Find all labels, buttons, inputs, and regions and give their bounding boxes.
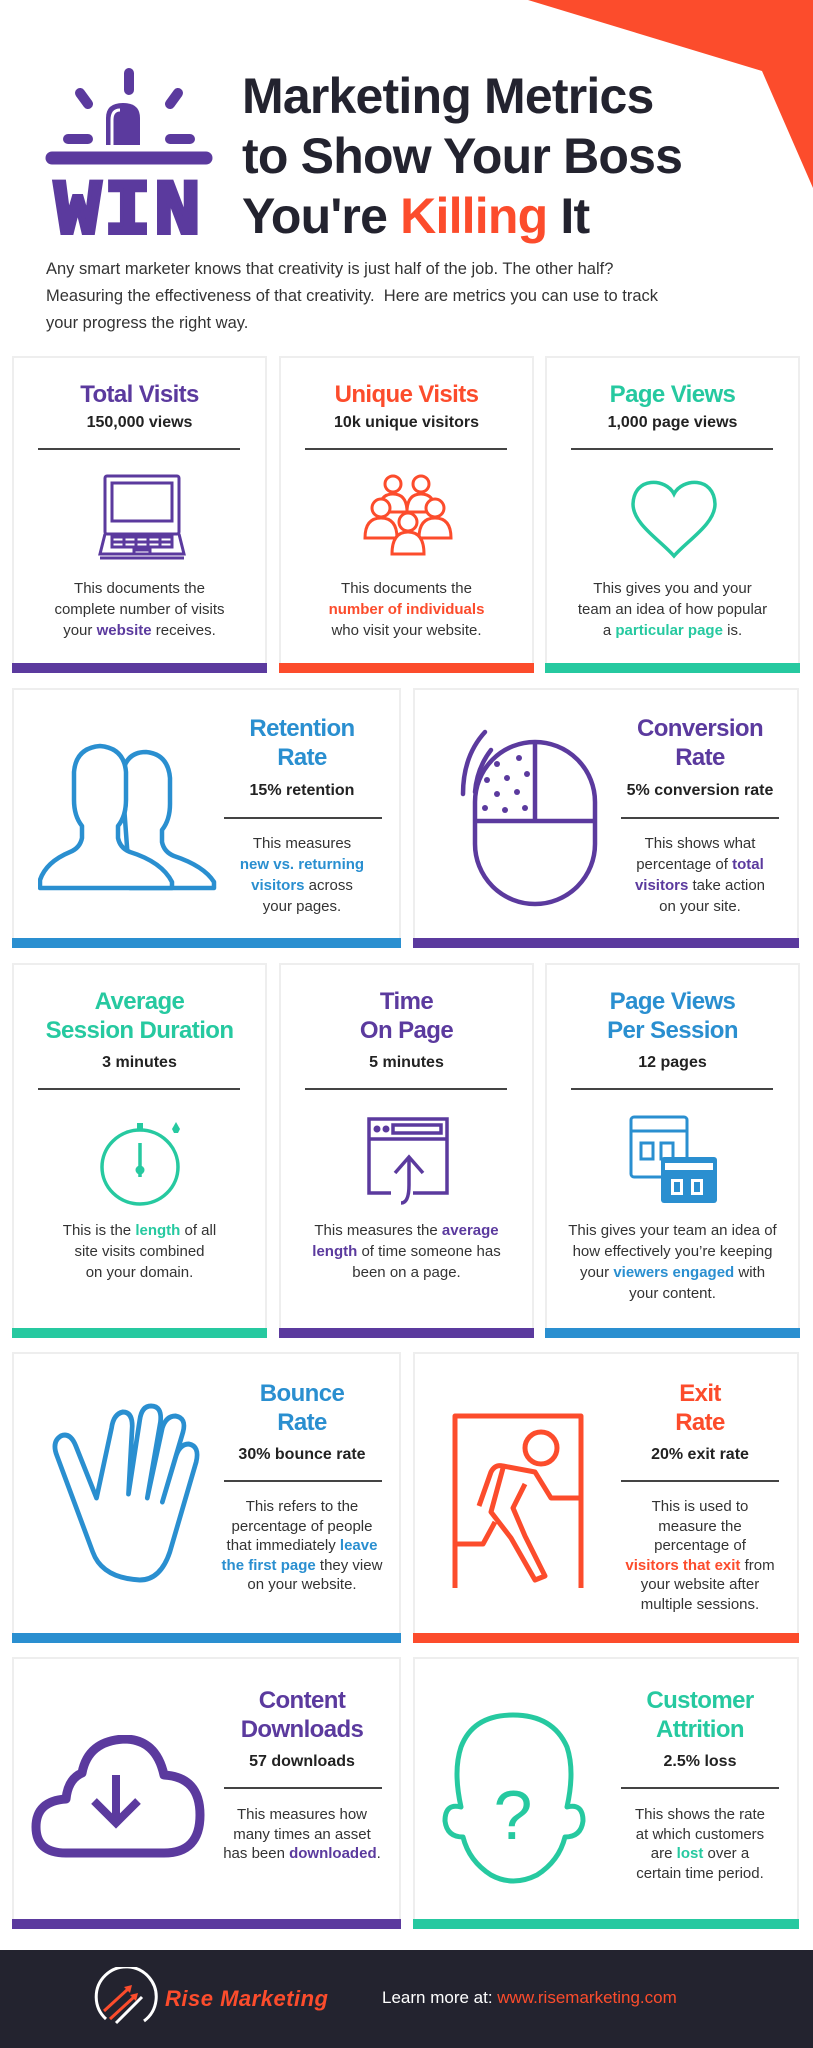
icon: stopwatch <box>100 1122 180 1206</box>
panel: conversion rate: Conversion <box>637 715 763 742</box>
panel: conversion rate: Rate <box>675 744 725 771</box>
panel: page views per session <box>545 963 800 1338</box>
panel: page views: 1,000 page views <box>608 414 737 431</box>
panel: customer attrition: Customer <box>646 1687 754 1714</box>
panel: unique visits: Unique Visits <box>335 381 478 408</box>
icon: rise marketing logo <box>94 1967 158 2024</box>
panel: unique visits <box>279 356 534 673</box>
panel: exit rate: Rate <box>675 1409 725 1436</box>
panel: conversion rate: visitors take action <box>635 877 765 894</box>
intro text <box>46 260 658 332</box>
panel: time on page: This measures the average <box>314 1222 499 1239</box>
panel: page views per session: your viewers engaged with <box>580 1264 765 1281</box>
panel: total visits: Total Visits <box>80 381 199 408</box>
panel: bounce rate <box>12 1352 401 1643</box>
panel: exit rate: Exit <box>679 1380 721 1407</box>
title: to Show Your Boss <box>242 128 682 184</box>
icon: heart <box>631 480 717 558</box>
panel: unique visits: number of individuals <box>329 601 484 618</box>
panel: retention rate: Rate <box>277 744 327 771</box>
panel: conversion rate: 5% conversion rate <box>627 782 773 799</box>
panel: average session duration: site visits combined <box>74 1243 205 1260</box>
panel: retention rate: new vs. returning <box>240 856 364 873</box>
icon: laptop <box>98 474 186 560</box>
panel: time on page: 5 minutes <box>369 1054 444 1071</box>
footer <box>0 1950 813 2048</box>
brand name: Rise Marketing <box>165 1986 328 2011</box>
panel: exit rate: This is used to <box>652 1498 748 1515</box>
panel: unique visits: who visit your website. <box>331 622 482 639</box>
panel: page views: team an idea of how popular <box>578 601 767 618</box>
panel: customer attrition <box>413 1657 799 1929</box>
icon: WIN siren logo <box>46 68 212 238</box>
panel: page views per session: how effectively you’re keeping <box>573 1243 772 1260</box>
panel: total visits: This documents the <box>74 580 205 597</box>
panel: page views <box>545 356 800 673</box>
panel: unique visits: 10k unique visitors <box>334 414 479 431</box>
panel: retention rate: visitors across <box>251 877 353 894</box>
panel: retention rate: This measures <box>253 835 351 852</box>
panel: bounce rate: the first page they view <box>222 1556 382 1574</box>
intro text: your progress the right way. <box>46 314 248 332</box>
panel: average session duration: 3 minutes <box>102 1054 177 1071</box>
panel: bounce rate: This refers to the <box>246 1498 358 1515</box>
panel: customer attrition: 2.5% loss <box>664 1753 736 1770</box>
panel: retention rate: your pages. <box>263 898 341 915</box>
icon: stacked windows <box>630 1116 717 1203</box>
panel: time on page: On Page <box>360 1017 453 1044</box>
panel: page views per session: Per Session <box>607 1017 738 1044</box>
panel: bounce rate: Bounce <box>260 1380 344 1407</box>
panel: average session duration <box>12 963 267 1338</box>
icon: browser upload <box>367 1117 449 1205</box>
title: Marketing Metrics <box>242 68 654 124</box>
panel: conversion rate <box>413 688 799 948</box>
panel: content downloads: has been downloaded. <box>223 1845 381 1862</box>
panel: retention rate: 15% retention <box>250 782 354 799</box>
panel: bounce rate: Rate <box>277 1409 327 1436</box>
panel: retention rate: Retention <box>249 715 355 742</box>
panel: conversion rate: on your site. <box>659 898 741 915</box>
panel: unique visits: This documents the <box>341 580 472 597</box>
panel: bounce rate: on your website. <box>247 1576 357 1593</box>
panel: customer attrition: This shows the rate <box>635 1806 765 1823</box>
panel: bounce rate: percentage of people <box>232 1518 372 1534</box>
panel: total visits: complete number of visits <box>54 601 225 618</box>
panel: page views per session: This gives your team an idea of <box>568 1222 777 1239</box>
panel: total visits: your website receives. <box>63 622 216 639</box>
panel: total visits <box>12 356 267 673</box>
title <box>242 68 682 244</box>
panel: page views: This gives you and your <box>593 580 752 597</box>
panel: content downloads: Downloads <box>241 1716 363 1743</box>
icon: hand <box>52 1404 200 1582</box>
panel: bounce rate: 30% bounce rate <box>238 1446 366 1463</box>
footer link text: Learn more at: www.risemarketing.com <box>382 1988 677 2007</box>
icon: two users <box>38 744 216 890</box>
panel: conversion rate: percentage of total <box>636 856 764 873</box>
panel: exit rate: 20% exit rate <box>651 1446 749 1463</box>
panel: exit rate: visitors that exit from <box>625 1556 775 1574</box>
panel: customer attrition: at which customers <box>636 1826 764 1842</box>
panel: customer attrition: certain time period. <box>636 1864 764 1882</box>
panel: page views: Page Views <box>610 381 735 408</box>
panel: exit rate: multiple sessions. <box>641 1596 759 1612</box>
panel: time on page: been on a page. <box>352 1264 461 1281</box>
panel: time on page: length of time someone has <box>312 1243 501 1260</box>
panel: content downloads: This measures how <box>237 1806 367 1823</box>
panel: average session duration: Average <box>95 988 184 1015</box>
intro text: Measuring the effectiveness of that creativity. Here are metrics you can use to track <box>46 287 658 305</box>
title: You're Killing It <box>242 188 589 244</box>
panel: page views per session: 12 pages <box>638 1054 707 1071</box>
panel: customer attrition: are lost over a <box>651 1845 749 1862</box>
panel: page views per session: Page Views <box>610 988 735 1015</box>
panel: customer attrition: Attrition <box>656 1716 744 1743</box>
panel: content downloads: 57 downloads <box>249 1753 355 1770</box>
panel: average session duration: Session Duration <box>46 1017 233 1044</box>
panel: exit rate: percentage of <box>654 1537 746 1554</box>
panel: page views: a particular page is. <box>603 622 742 639</box>
panel: exit rate: measure the <box>658 1518 742 1534</box>
panel: exit rate: your website after <box>641 1576 759 1593</box>
panel: page views per session: your content. <box>629 1285 716 1302</box>
panel: conversion rate: This shows what <box>645 835 755 852</box>
panel: content downloads: many times an asset <box>233 1826 371 1842</box>
panel: time on page: Time <box>380 988 433 1015</box>
panel: exit rate <box>413 1352 799 1643</box>
icon: cloud download <box>32 1735 204 1858</box>
icon: head with question mark <box>442 1712 586 1884</box>
icon: people group <box>364 474 452 556</box>
panel: content downloads <box>12 1657 401 1929</box>
icon: head with question mark: ? <box>494 1776 532 1854</box>
panel: content downloads: Content <box>259 1687 345 1714</box>
panel: total visits: 150,000 views <box>87 414 192 431</box>
intro text: Any smart marketer knows that creativity is just half of the job. The other half? <box>46 260 613 278</box>
decorative corner triangle <box>528 0 813 188</box>
panel: average session duration: This is the length of all <box>63 1222 216 1239</box>
icon: exit door runner <box>452 1414 584 1588</box>
panel: retention rate <box>12 688 401 948</box>
panel: time on page <box>279 963 534 1338</box>
icon: mouse <box>460 730 598 906</box>
panel: bounce rate: that immediately leave <box>227 1537 377 1554</box>
panel: average session duration: on your domain. <box>86 1264 193 1281</box>
